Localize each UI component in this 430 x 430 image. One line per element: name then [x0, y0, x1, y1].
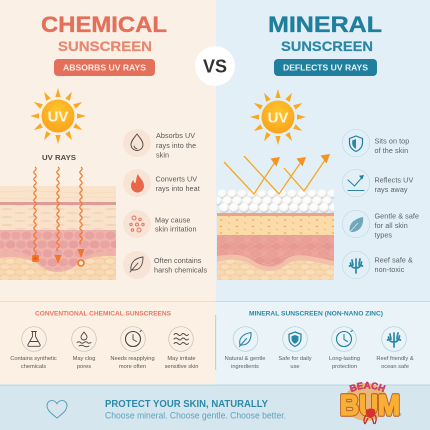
chemical point 1: skin — [156, 150, 169, 160]
mineral point 4: Reef safe & — [374, 256, 413, 264]
conventional item 3: more often — [119, 364, 146, 370]
chemical point 1 — [123, 129, 196, 160]
chemical point 3 — [123, 210, 197, 238]
mineral point 2: rays away — [374, 185, 408, 194]
mineral item 2 — [278, 327, 312, 370]
mineral point 3: types — [374, 230, 392, 240]
mineral item 2: use — [290, 364, 300, 370]
mineral zinc spheres — [212, 190, 339, 213]
chemical badge — [54, 59, 155, 76]
mineral point 3: Gentle & safe — [374, 212, 419, 220]
mineral item 1 — [225, 327, 265, 370]
chemical title — [41, 12, 167, 54]
panel: mineral background — [216, 0, 430, 385]
mineral badge: DEFLECTS UV RAYS — [283, 64, 369, 72]
mineral point 2 — [342, 169, 413, 197]
mineral item 3 — [329, 327, 360, 370]
mineral item 4 — [376, 327, 414, 370]
conventional heading: CONVENTIONAL CHEMICAL SUNSCREENS — [35, 310, 172, 318]
footer tagline: Choose mineral. Choose gentle. Choose better. — [105, 410, 286, 420]
mineral point 3: for all skin — [374, 221, 408, 230]
conventional item 4 — [165, 327, 198, 370]
logo: Beach Bum: BUM — [340, 390, 400, 422]
chemical point 1: Absorbs UV — [156, 131, 195, 140]
skin cross-section right — [217, 213, 334, 280]
chemical point 2: Converts UV — [156, 174, 197, 184]
logo: Beach Bum: ® — [399, 413, 402, 417]
conventional item 2: May clog — [73, 356, 95, 362]
chemical point 1: rays into the — [156, 141, 196, 150]
chemical title: CHEMICAL — [41, 12, 167, 37]
conventional item 3 — [110, 327, 155, 370]
mineral heading: MINERAL SUNSCREEN (NON-NANO ZINC) — [249, 310, 383, 318]
footer band — [0, 384, 430, 430]
panel: conventional chemical sunscreens — [0, 296, 215, 385]
chemical badge: ABSORBS UV RAYS — [63, 64, 147, 72]
chemical point 2 — [123, 169, 200, 197]
logo: Beach Bum: BUM — [340, 390, 400, 422]
UV rays label: UV RAYS — [42, 153, 76, 162]
conventional item 2 — [72, 327, 96, 370]
mineral point 1: of the skin — [374, 146, 408, 155]
mineral title: MINERAL — [268, 12, 382, 37]
mineral item 3: protection — [332, 364, 357, 370]
chemical title: SUNSCREEN — [58, 39, 152, 54]
logo: Beach Bum: BEACH — [349, 382, 386, 392]
mineral item 1: ingredients — [231, 364, 259, 370]
chemical point 3: May cause — [155, 216, 190, 224]
chemical point 4 — [123, 251, 207, 279]
mineral point 3 — [342, 210, 419, 240]
mineral title — [268, 12, 382, 54]
footer headline: PROTECT YOUR SKIN, NATURALLY — [105, 399, 268, 410]
conventional item 1: chemicals — [21, 364, 46, 370]
skin cross-section left — [0, 186, 116, 280]
mineral point 1: Sits on top — [374, 136, 409, 146]
mineral item 2: Safe for daily — [278, 356, 312, 362]
icon: sun right — [250, 89, 306, 145]
chemical point 2: rays into heat — [156, 184, 200, 193]
conventional item 2: pores — [77, 364, 91, 370]
chemical point 4: Often contains — [154, 256, 202, 265]
mineral point 4 — [342, 251, 413, 279]
chemical point 4: harsh chemicals — [154, 266, 207, 274]
reflected UV arrows — [224, 154, 330, 194]
mineral point 1 — [342, 129, 409, 157]
VS badge: VS — [203, 56, 227, 76]
mineral point 2: Reflects UV — [374, 176, 413, 184]
icon: sun right: UV — [268, 110, 288, 126]
mineral point 4: non-toxic — [374, 265, 405, 274]
icon: sun left — [30, 88, 86, 144]
conventional item 1: Contains synthetic — [10, 356, 57, 362]
panel: mineral sunscreens — [215, 301, 430, 385]
conventional item 4: May irritate — [167, 356, 196, 362]
icon: heart — [47, 400, 67, 418]
conventional item 4: sensitive skin — [165, 364, 198, 370]
conventional item 1 — [10, 327, 57, 370]
mineral title: SUNSCREEN — [281, 39, 373, 54]
mineral item 1: Natural & gentle — [225, 356, 265, 362]
mineral item 4: Reef friendly & — [376, 356, 414, 362]
VS badge — [195, 46, 235, 86]
mineral badge — [274, 59, 377, 76]
panel: chemical background — [0, 0, 216, 385]
chemical point 3: skin irritation — [155, 224, 197, 234]
mineral item 4: ocean safe — [381, 364, 409, 370]
UV rays wavy arrows left — [32, 167, 84, 266]
icon: sun left: UV — [48, 108, 68, 126]
mineral item 3: Long-lasting — [329, 356, 360, 362]
conventional item 3: Needs reapplying — [110, 356, 155, 362]
